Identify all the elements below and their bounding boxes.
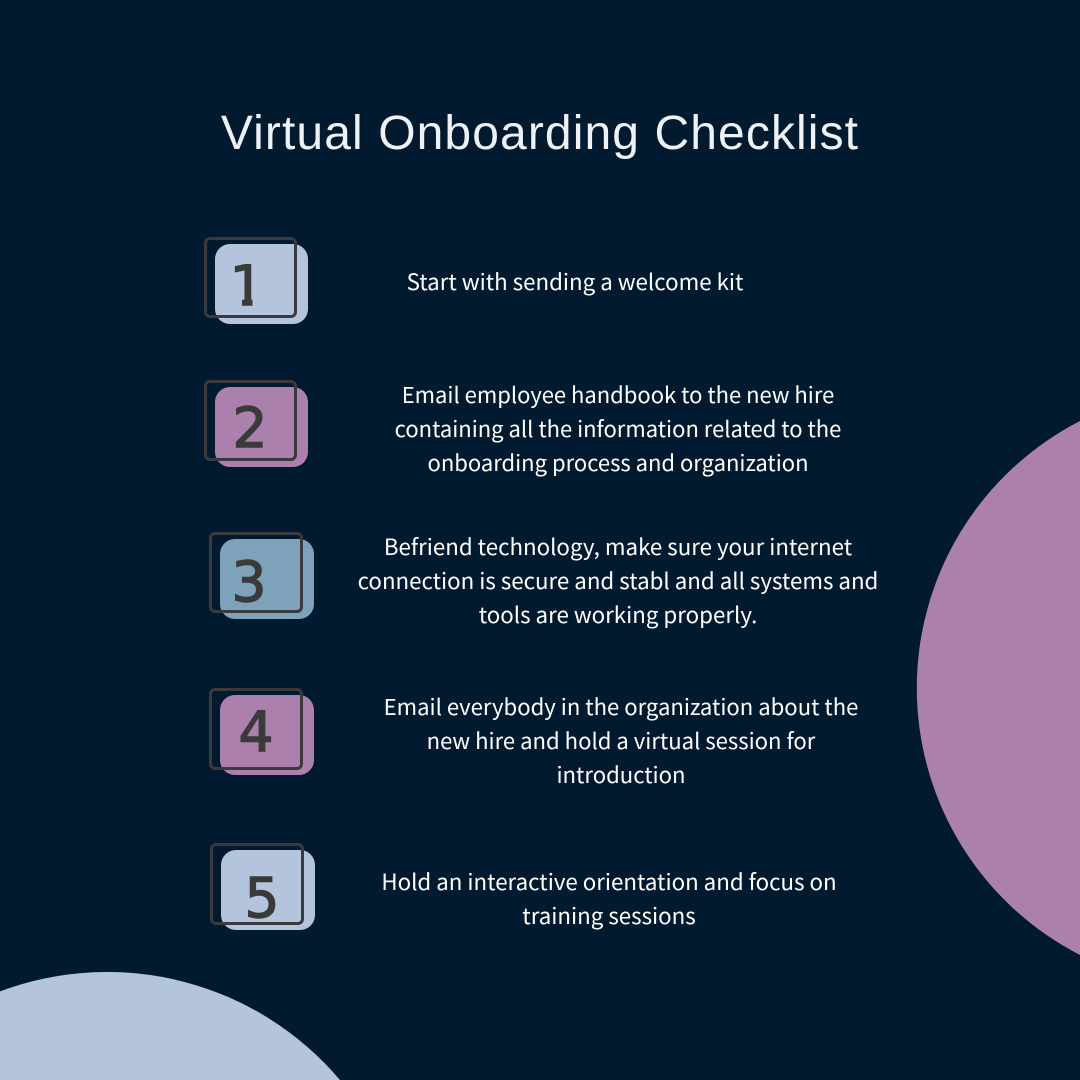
step 1 text: Start with sending a welcome kit bbox=[407, 265, 743, 297]
number badge 1 bbox=[204, 237, 308, 324]
step 4 text bbox=[384, 690, 858, 790]
number badge 4 bbox=[209, 688, 314, 775]
step 3 text bbox=[358, 530, 878, 630]
step 2 text bbox=[395, 378, 841, 478]
number badge 3 bbox=[209, 532, 314, 619]
step 2 text: onboarding process and organization bbox=[427, 446, 809, 478]
step 5 text bbox=[381, 865, 837, 931]
step 3 text: connection is secure and stabl and all systems and bbox=[358, 564, 878, 596]
step 4 text: Email everybody in the organization about the bbox=[384, 690, 858, 722]
step 5 text: training sessions bbox=[522, 899, 696, 931]
number badge 4: 4 bbox=[238, 700, 274, 764]
step 2 text: Email employee handbook to the new hire bbox=[402, 378, 834, 410]
number badge 1: 1 bbox=[230, 254, 264, 318]
title: Virtual Onboarding Checklist bbox=[221, 107, 859, 160]
step 3 text: tools are working properly. bbox=[479, 598, 757, 630]
number badge 3: 3 bbox=[232, 550, 266, 614]
number badge 5: 5 bbox=[244, 866, 280, 930]
step 2 text: containing all the information related to the bbox=[395, 412, 841, 444]
decorative circle: right purple bbox=[917, 421, 1080, 955]
step 5 text: Hold an interactive orientation and focus on bbox=[381, 865, 837, 897]
decorative circle: bottom-left blue bbox=[0, 972, 340, 1080]
number badge 2 bbox=[204, 380, 308, 467]
step 4 text: introduction bbox=[556, 758, 686, 790]
step 3 text: Befriend technology, make sure your internet bbox=[384, 530, 852, 562]
number badge 5 bbox=[210, 843, 315, 930]
number badge 2: 2 bbox=[232, 396, 268, 460]
step 4 text: new hire and hold a virtual session for bbox=[427, 724, 815, 756]
